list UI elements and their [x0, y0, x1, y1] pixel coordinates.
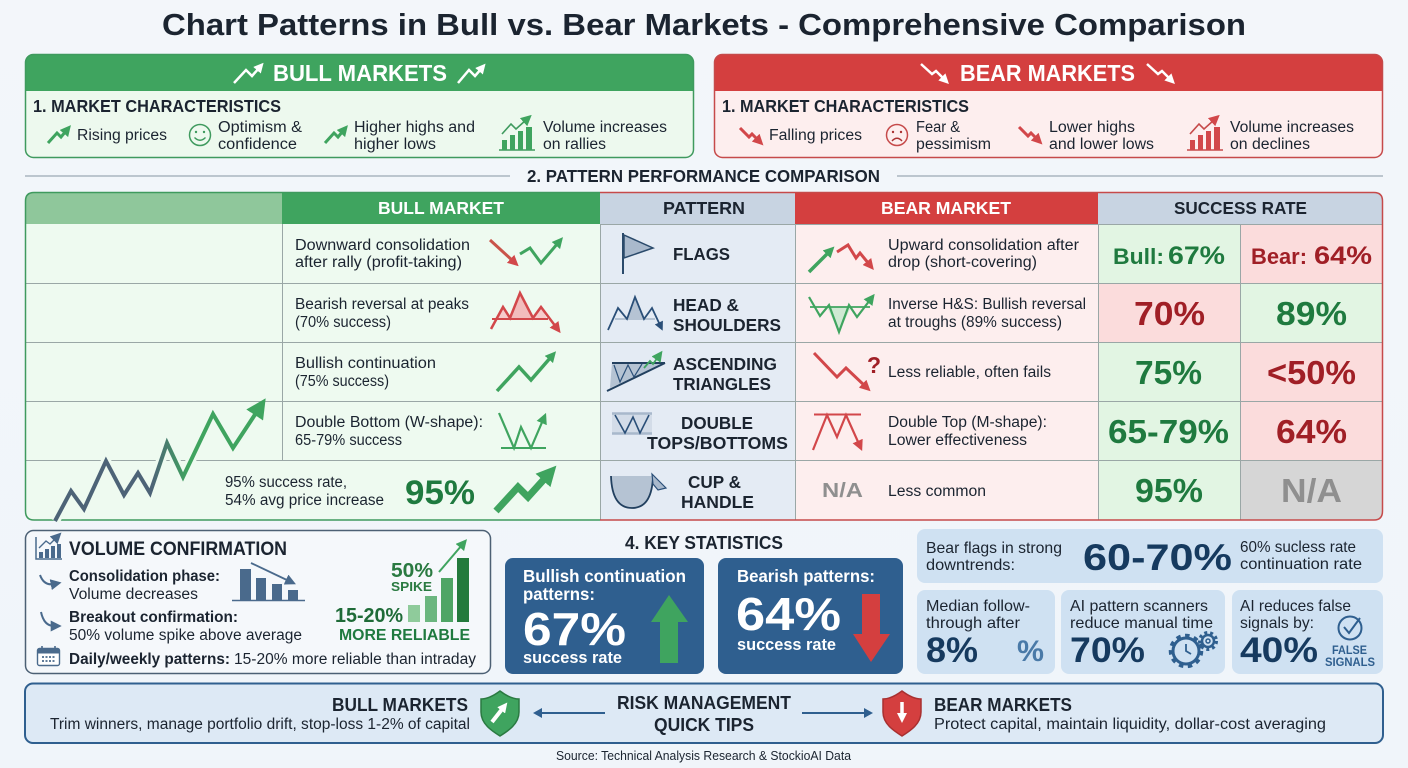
- stat card: bearish patterns: 64%: [736, 588, 841, 640]
- pattern: cup and handle: [611, 472, 754, 512]
- stat card: bullish continuation: success rate: [523, 648, 622, 667]
- row: ascending triangles bull: (75% success): [295, 373, 389, 390]
- item: volume on declines: on declines: [1230, 136, 1310, 153]
- title: Chart Patterns in Bull vs. Bear Markets - Comprehensive Comparison: [162, 7, 1246, 42]
- item: lower highs: Lower highs: [1049, 119, 1135, 136]
- item: lower highs: and lower lows: [1049, 136, 1154, 153]
- heading: volume confirmation: VOLUME CONFIRMATION: [69, 539, 287, 560]
- item: volume on rallies: [499, 119, 667, 153]
- success rate: flags: 64%: [1314, 242, 1372, 270]
- row: inverse head and shoulders bear: Inverse H&S: Bullish reversal: [888, 296, 1086, 313]
- text: breakout confirmation: [69, 609, 302, 644]
- item: volume on rallies: Volume increases: [543, 119, 667, 136]
- stat card: bullish continuation: patterns:: [523, 584, 595, 604]
- chart: rising price line: [55, 410, 258, 521]
- icon: up arrow: [651, 595, 688, 663]
- icon: red shield: [883, 691, 921, 736]
- success rate: flags: 67%: [1168, 242, 1225, 270]
- success rate: head and shoulders: [1134, 295, 1347, 332]
- text: consolidation phase: Consolidation phase:: [69, 568, 220, 585]
- item: optimism: Optimism &: [218, 119, 303, 136]
- stat card: ai false signals: 40%: [1240, 631, 1318, 670]
- chart: volume spike bars: SPIKE: [391, 580, 432, 594]
- stat card: ai scanners: [1061, 590, 1225, 674]
- item: fear: pessimism: [916, 136, 991, 153]
- row: inverse head and shoulders bear: [809, 296, 1086, 332]
- stat card: bullish continuation: 67%: [523, 603, 626, 655]
- stat card: ai false signals: FALSE: [1332, 645, 1367, 657]
- table header: BEAR MARKET: [881, 198, 1011, 218]
- text: bear markets tips: [934, 695, 1326, 733]
- arrow: left: [533, 708, 605, 718]
- chart: declining volume bars: [232, 563, 305, 600]
- table header: [378, 198, 1307, 218]
- success rate: double tops and bottoms: [1108, 413, 1347, 450]
- stat card: ai scanners: 70%: [1070, 631, 1145, 670]
- heading: bull markets: BULL MARKETS: [273, 60, 447, 86]
- row: double top bear: Double Top (M-shape):: [888, 414, 1047, 431]
- item: optimism: [190, 119, 303, 153]
- stat card: bearish patterns: [718, 558, 903, 674]
- success rate: flags: Bull:: [1113, 244, 1164, 269]
- row: cup and handle bear: [822, 480, 986, 502]
- item: fear: [886, 119, 991, 153]
- row: flags bull: Downward consolidation: [295, 237, 470, 254]
- row: cup and handle bear: Less common: [888, 483, 986, 500]
- stat card: bear flags: Bear flags in strong: [926, 540, 1062, 557]
- stat card: bear flags: [917, 529, 1383, 583]
- item: higher highs: Higher highs and: [354, 119, 475, 136]
- item: rising prices: Rising prices: [77, 127, 167, 144]
- chart: volume spike bars: 50%: [391, 560, 433, 582]
- text: daily weekly patterns: [69, 651, 476, 668]
- pattern: cup and handle: HANDLE: [681, 492, 754, 512]
- chart: volume spike bars: 15-20%: [335, 605, 403, 627]
- stat card: bear flags: downtrends:: [926, 557, 1015, 574]
- panel: bull markets characteristics: [25, 54, 694, 158]
- stat card: bearish patterns: Bearish patterns:: [737, 566, 875, 586]
- icon: check circle: [1338, 616, 1362, 640]
- stat card: median follow-through: [917, 590, 1055, 674]
- row: ascending triangles bear: ?: [867, 352, 881, 378]
- stat card: median follow-through: Median follow-: [926, 598, 1030, 615]
- chart: volume spike bars: [335, 545, 470, 644]
- success rate: cup and handle: [1135, 472, 1342, 509]
- stat card: median follow-through: through after: [926, 615, 1021, 632]
- subheading: market characteristics: 1. MARKET CHARACTERISTICS: [722, 96, 969, 116]
- arrow: right: [802, 708, 873, 718]
- icon: calendar: [38, 646, 60, 666]
- text: risk management: [617, 693, 791, 735]
- row: head and shoulders bull: Bearish reversal at peaks: [295, 296, 469, 313]
- success rate: double tops and bottoms: 65-79%: [1108, 413, 1229, 450]
- stat card: median follow-through: 8%: [926, 631, 978, 670]
- stat card: ai false signals: AI reduces false: [1240, 598, 1351, 615]
- item: volume on declines: Volume increases: [1230, 119, 1354, 136]
- item: lower highs: [1019, 119, 1154, 153]
- row: double top bear: Lower effectiveness: [888, 432, 1027, 449]
- text: bull markets tips: BULL MARKETS: [332, 695, 468, 715]
- pattern: double tops and bottoms: [612, 413, 788, 453]
- icon: percent: %: [1017, 635, 1044, 668]
- pattern: flags: FLAGS: [673, 244, 730, 264]
- text: bull markets tips: [50, 695, 470, 733]
- pattern: head and shoulders: SHOULDERS: [673, 315, 781, 335]
- success rate: double tops and bottoms: 64%: [1276, 413, 1347, 450]
- success rate: head and shoulders: 89%: [1276, 295, 1347, 332]
- subheading: market characteristics: 1. MARKET CHARACTERISTICS: [33, 96, 281, 116]
- pattern: ascending triangles: ASCENDING: [673, 354, 777, 374]
- table header: BULL MARKET: [378, 198, 504, 218]
- stat card: bearish patterns: success rate: [737, 635, 836, 654]
- row: flags bear: [809, 237, 1079, 272]
- item: volume on declines: [1187, 119, 1354, 153]
- table header: SUCCESS RATE: [1174, 198, 1307, 218]
- row: inverse head and shoulders bear: at troughs (89% success): [888, 314, 1062, 331]
- item: higher highs: higher lows: [354, 136, 436, 153]
- item: falling prices: Falling prices: [769, 127, 862, 144]
- success rate: head and shoulders: 70%: [1134, 295, 1205, 332]
- item: volume on rallies: on rallies: [543, 136, 606, 153]
- stat card: ai false signals: signals by:: [1240, 615, 1314, 632]
- row: head and shoulders bull: [295, 293, 556, 331]
- icon: arrow breakout: [41, 612, 54, 626]
- icon: volume chart: [36, 537, 62, 559]
- success rate: flags: [1113, 242, 1372, 270]
- heading: bear markets: BEAR MARKETS: [960, 60, 1135, 86]
- text: bear markets tips: BEAR MARKETS: [934, 695, 1072, 715]
- text: daily weekly patterns: Daily/weekly patterns:: [69, 651, 230, 668]
- text: bull markets tips: Trim winners, manage portfolio drift, stop-loss 1-2% of capital: [50, 716, 470, 733]
- row: cup and handle bear: N/A: [822, 480, 863, 502]
- pattern: head and shoulders: HEAD &: [673, 295, 739, 315]
- row: cup and handle bull: 54% avg price increase: [225, 492, 384, 509]
- panel: risk management quick tips: [25, 684, 1383, 743]
- stat card: ai false signals: [1232, 590, 1383, 674]
- row: double bottom bull: 65-79% success: [295, 432, 402, 449]
- heading: pattern performance comparison: 2. PATTERN PERFORMANCE COMPARISON: [527, 166, 880, 186]
- item: fear: Fear &: [916, 119, 961, 136]
- pattern: cup and handle: CUP &: [688, 472, 741, 492]
- stat card: ai scanners: AI pattern scanners: [1070, 598, 1208, 615]
- row: double bottom bull: [295, 413, 546, 449]
- icon: arrow consolidation: [40, 575, 54, 584]
- pattern: head and shoulders: [608, 295, 781, 335]
- text: consolidation phase: [69, 568, 220, 603]
- text: risk management: RISK MANAGEMENT: [617, 693, 791, 713]
- row: double bottom bull: Double Bottom (W-shape):: [295, 414, 483, 431]
- row: flags bear: drop (short-covering): [888, 254, 1037, 271]
- row: flags bull: after rally (profit-taking): [295, 254, 462, 271]
- source note: Source: Technical Analysis Research & StockioAI Data: [556, 749, 851, 763]
- panel: bear markets characteristics: [714, 54, 1383, 158]
- row: ascending triangles bull: [295, 355, 551, 391]
- text: breakout confirmation: 50% volume spike above average: [69, 627, 302, 644]
- row: ascending triangles bear: [814, 352, 1051, 386]
- pattern: flags: [623, 233, 730, 274]
- success rate: cup and handle: 95%: [1135, 472, 1203, 509]
- stat card: bear flags: continuation rate: [1240, 556, 1362, 573]
- text: consolidation phase: Volume decreases: [69, 586, 198, 603]
- table header: PATTERN: [663, 198, 745, 218]
- heading: key statistics: 4. KEY STATISTICS: [625, 532, 783, 553]
- text: risk management: QUICK TIPS: [654, 715, 754, 735]
- text: daily weekly patterns: 15-20% more reliable than intraday: [234, 651, 476, 668]
- stat card: ai false signals: SIGNALS: [1325, 657, 1375, 669]
- panel: pattern comparison table: [25, 192, 1383, 521]
- pattern: ascending triangles: [607, 354, 777, 394]
- stat card: bullish continuation: [505, 558, 704, 674]
- stat card: bear flags: 60% sucless rate: [1240, 539, 1356, 556]
- item: higher highs: [325, 119, 475, 153]
- success rate: ascending triangles: [1135, 354, 1356, 391]
- panel: volume confirmation: [26, 530, 490, 674]
- stat card: bullish continuation: Bullish continuation: [523, 566, 686, 586]
- stat card: bear flags: 60-70%: [1083, 537, 1232, 578]
- success rate: ascending triangles: 75%: [1135, 354, 1202, 391]
- row: flags bull: [295, 237, 558, 271]
- icon: gears and clock: [1170, 632, 1216, 666]
- row: ascending triangles bull: Bullish continuation: [295, 355, 436, 372]
- pattern: ascending triangles: TRIANGLES: [673, 374, 771, 394]
- chart: volume spike bars: MORE RELIABLE: [339, 627, 470, 644]
- pattern: double tops and bottoms: TOPS/BOTTOMS: [647, 433, 788, 453]
- row: cup and handle bull: 95%: [405, 474, 475, 512]
- text: bear markets tips: Protect capital, maintain liquidity, dollar-cost averaging: [934, 716, 1326, 733]
- item: optimism: confidence: [218, 136, 297, 153]
- icon: down arrow: [853, 594, 890, 662]
- row: flags bear: Upward consolidation after: [888, 237, 1079, 254]
- row: cup and handle bull: 95% success rate,: [225, 474, 347, 491]
- row: double top bear: [813, 414, 1047, 450]
- row: cup and handle bull: [225, 474, 547, 512]
- row: head and shoulders bull: (70% success): [295, 314, 391, 331]
- text: breakout confirmation: Breakout confirmation:: [69, 609, 238, 626]
- stat card: ai scanners: reduce manual time: [1070, 615, 1213, 632]
- icon: green shield: [481, 691, 519, 736]
- success rate: flags: Bear:: [1251, 244, 1307, 269]
- pattern: double tops and bottoms: DOUBLE: [681, 413, 753, 433]
- success rate: ascending triangles: <50%: [1267, 354, 1356, 391]
- success rate: cup and handle: N/A: [1281, 472, 1342, 509]
- row: ascending triangles bear: Less reliable, often fails: [888, 364, 1051, 381]
